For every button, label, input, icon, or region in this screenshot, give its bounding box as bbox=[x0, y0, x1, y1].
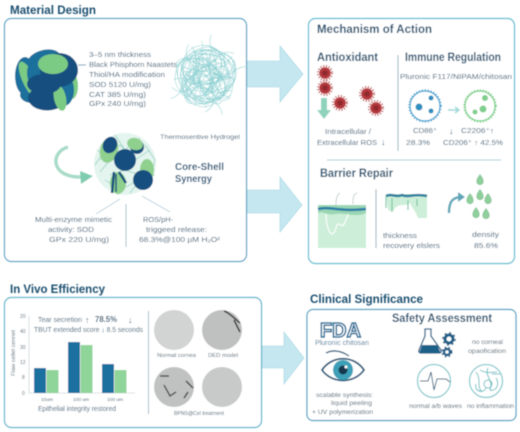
bar chart: epithelial integrity: 100 um bbox=[73, 397, 89, 403]
text: polymer composition: Pluronic F117/NIPAM/chitosan bbox=[400, 72, 512, 81]
text: tear secretion and TBUT: TBUT extended score ↓ 8.5 seconds bbox=[34, 325, 143, 334]
text: ROS release: ROS/pH- bbox=[143, 215, 174, 224]
text: multi-enzyme activity: Multi-enzyme mimetic bbox=[35, 215, 112, 224]
text: scalable synthesis: + UV polymerization bbox=[312, 409, 373, 416]
icon: core-shell hydrogel sphere bbox=[94, 133, 156, 195]
text: normal cornea label: Normal cornea bbox=[157, 353, 197, 359]
text: macrophage markers: CD86⁺ bbox=[413, 126, 437, 135]
arrow: in vivo to clinical bbox=[262, 332, 304, 384]
bar chart: epithelial integrity: 8 bbox=[22, 375, 25, 381]
icon: damaged tissue bbox=[318, 193, 366, 248]
text: multi-enzyme activity bbox=[35, 215, 112, 244]
text: intracellular ROS bbox=[317, 127, 386, 147]
text: macrophage markers bbox=[406, 126, 503, 147]
icon: cell density drops bbox=[467, 174, 491, 219]
icon: waveform circle bbox=[418, 364, 450, 398]
text: intracellular ROS: ↓ bbox=[381, 137, 386, 147]
arrow: material to mechanism bottom bbox=[247, 177, 302, 232]
text: nanosheet properties: CAT 385 U/mg) bbox=[89, 90, 146, 99]
text: thermosensitive hydrogel label: Thermosentive Hydrogel bbox=[160, 134, 240, 141]
icon: M1 macrophage cell bbox=[409, 90, 441, 122]
text: density: density bbox=[472, 230, 499, 239]
text: tear secretion and TBUT bbox=[34, 315, 143, 334]
icon: recovering tissue bbox=[386, 194, 427, 218]
text: nanosheet properties: 3–5 nm thickness bbox=[89, 50, 151, 59]
text: macrophage markers: 28.3% bbox=[406, 138, 430, 147]
text: nanosheet properties: Black Phisphorn Naastets bbox=[89, 60, 177, 69]
text: tear secretion and TBUT: Tear secretion bbox=[38, 315, 82, 324]
bar chart: epithelial integrity bbox=[11, 314, 135, 413]
text: tear secretion and TBUT: ↑ bbox=[85, 315, 90, 325]
text: ROS release bbox=[139, 215, 221, 244]
text: intracellular ROS: Intracellular / bbox=[325, 127, 372, 136]
heading: antioxidant: Antioxidant bbox=[317, 52, 378, 64]
panel: material design bbox=[4, 18, 255, 262]
icon: circular arrow bbox=[56, 147, 82, 177]
text: core-shell synergy: Synergy bbox=[175, 174, 212, 185]
icon: polymer fibre network bbox=[155, 29, 255, 127]
bar chart: epithelial integrity: 10um bbox=[41, 397, 53, 403]
text: treatment label: BPNS@Cel treatment bbox=[174, 411, 224, 417]
text: macrophage markers: ↓ bbox=[449, 126, 454, 136]
icon: up-curving arrow bbox=[449, 197, 460, 213]
bar chart: epithelial integrity: 40 bbox=[20, 329, 26, 335]
text: ROS release: 68.3%@100 µM H₂O² bbox=[139, 235, 221, 244]
text: scalable synthesis bbox=[312, 392, 373, 416]
icon: down arrow ROS bbox=[317, 98, 331, 119]
bar chart: epithelial integrity: 0 bbox=[22, 391, 25, 397]
bar chart: epithelial integrity: 100 um bbox=[107, 397, 123, 403]
bar chart: epithelial integrity: Epithelial integrity restored bbox=[38, 404, 116, 413]
heading: Material Design: Material Design bbox=[10, 5, 96, 17]
text: scalable synthesis: scalable synthesis: bbox=[316, 392, 373, 399]
heading: mechanism of action: Mechanism of Action bbox=[317, 24, 432, 36]
panel: mechanism of action bbox=[308, 18, 514, 264]
text: ROS release: triggeed release: bbox=[146, 225, 207, 234]
text: nanosheet properties: GPx 240 U/mg) bbox=[89, 99, 146, 108]
text: multi-enzyme activity: GPx 220 U/mg) bbox=[49, 235, 109, 244]
text: density: 85.6% bbox=[474, 241, 498, 250]
text: no corneal opacification: no corneal bbox=[472, 339, 503, 346]
heading: barrier repair: Barrier Repair bbox=[320, 168, 393, 180]
text: core-shell synergy: Core-Shell bbox=[175, 162, 224, 173]
heading: immune regulation: Immune Regulation bbox=[405, 52, 501, 64]
icon: curved arrow above eye bbox=[326, 351, 349, 356]
text: density bbox=[472, 230, 499, 250]
text: nanosheet properties: SOD 5120 U/mg) bbox=[89, 80, 151, 89]
icon: flask and gears bbox=[419, 329, 455, 357]
image: normal cornea bbox=[154, 310, 194, 350]
bar chart: epithelial integrity: Flaw cellel cennet bbox=[11, 330, 17, 376]
text: macrophage markers: CD206⁺ ↑ 42.5% bbox=[443, 138, 503, 147]
arrow: material to mechanism top bbox=[247, 46, 303, 102]
text: no corneal opacification: opaofication bbox=[468, 348, 507, 355]
text: no corneal opacification bbox=[468, 339, 507, 355]
text: thickness recovery: thickness bbox=[383, 231, 417, 240]
icon: eye bbox=[322, 359, 364, 380]
text: normal a/b waves: normal a/b waves bbox=[409, 403, 462, 410]
bar chart: epithelial integrity: 30 bbox=[20, 345, 26, 351]
text: tear secretion and TBUT: 78.5% bbox=[95, 315, 117, 324]
text: thickness recovery bbox=[383, 231, 440, 250]
bar chart: epithelial integrity: 12 bbox=[20, 360, 26, 366]
text: DED model label: DED model bbox=[208, 353, 238, 359]
text: nanosheet properties bbox=[89, 50, 177, 108]
text: nanosheet properties: Thiol/HA modification bbox=[89, 70, 165, 79]
heading: in vivo efficiency: In Vivo Efficiency bbox=[10, 284, 106, 296]
text: thickness recovery: recovery elslers bbox=[383, 241, 440, 250]
icon: FDA logo: FDA bbox=[320, 320, 361, 342]
text: intracellular ROS: Extracellular ROS bbox=[317, 138, 377, 147]
panel: clinical significance bbox=[307, 310, 516, 420]
panel: in vivo efficiency bbox=[4, 298, 262, 428]
text: tear secretion and TBUT: ↓ bbox=[128, 315, 132, 325]
icon: M2 macrophage cell bbox=[464, 90, 496, 122]
heading: clinical significance: Clinical Significance bbox=[310, 294, 423, 306]
icon: tissue circle bbox=[470, 364, 502, 398]
text: core-shell synergy bbox=[175, 162, 224, 185]
icon: cell transition arrow bbox=[448, 107, 459, 113]
text: pluronic chitosan: Pluronic chitosan bbox=[315, 340, 369, 347]
image: DED model bbox=[202, 310, 242, 350]
image: treated cornea bbox=[202, 367, 242, 407]
text: macrophage markers: C2206⁺↑ bbox=[461, 126, 494, 135]
image: BPNS treatment cornea bbox=[154, 367, 194, 407]
text: no inflammation: no inflammation bbox=[467, 403, 515, 410]
icon: ROS viruses bbox=[318, 66, 383, 115]
text: multi-enzyme activity: activity: SOD bbox=[48, 225, 94, 234]
bar chart: epithelial integrity: 20 bbox=[20, 314, 26, 320]
text: scalable synthesis: liquid peeling bbox=[331, 400, 372, 407]
heading: safety assessment: Safety Assessment bbox=[392, 313, 492, 325]
icon: black phosphorus nanosheets bbox=[15, 46, 78, 112]
